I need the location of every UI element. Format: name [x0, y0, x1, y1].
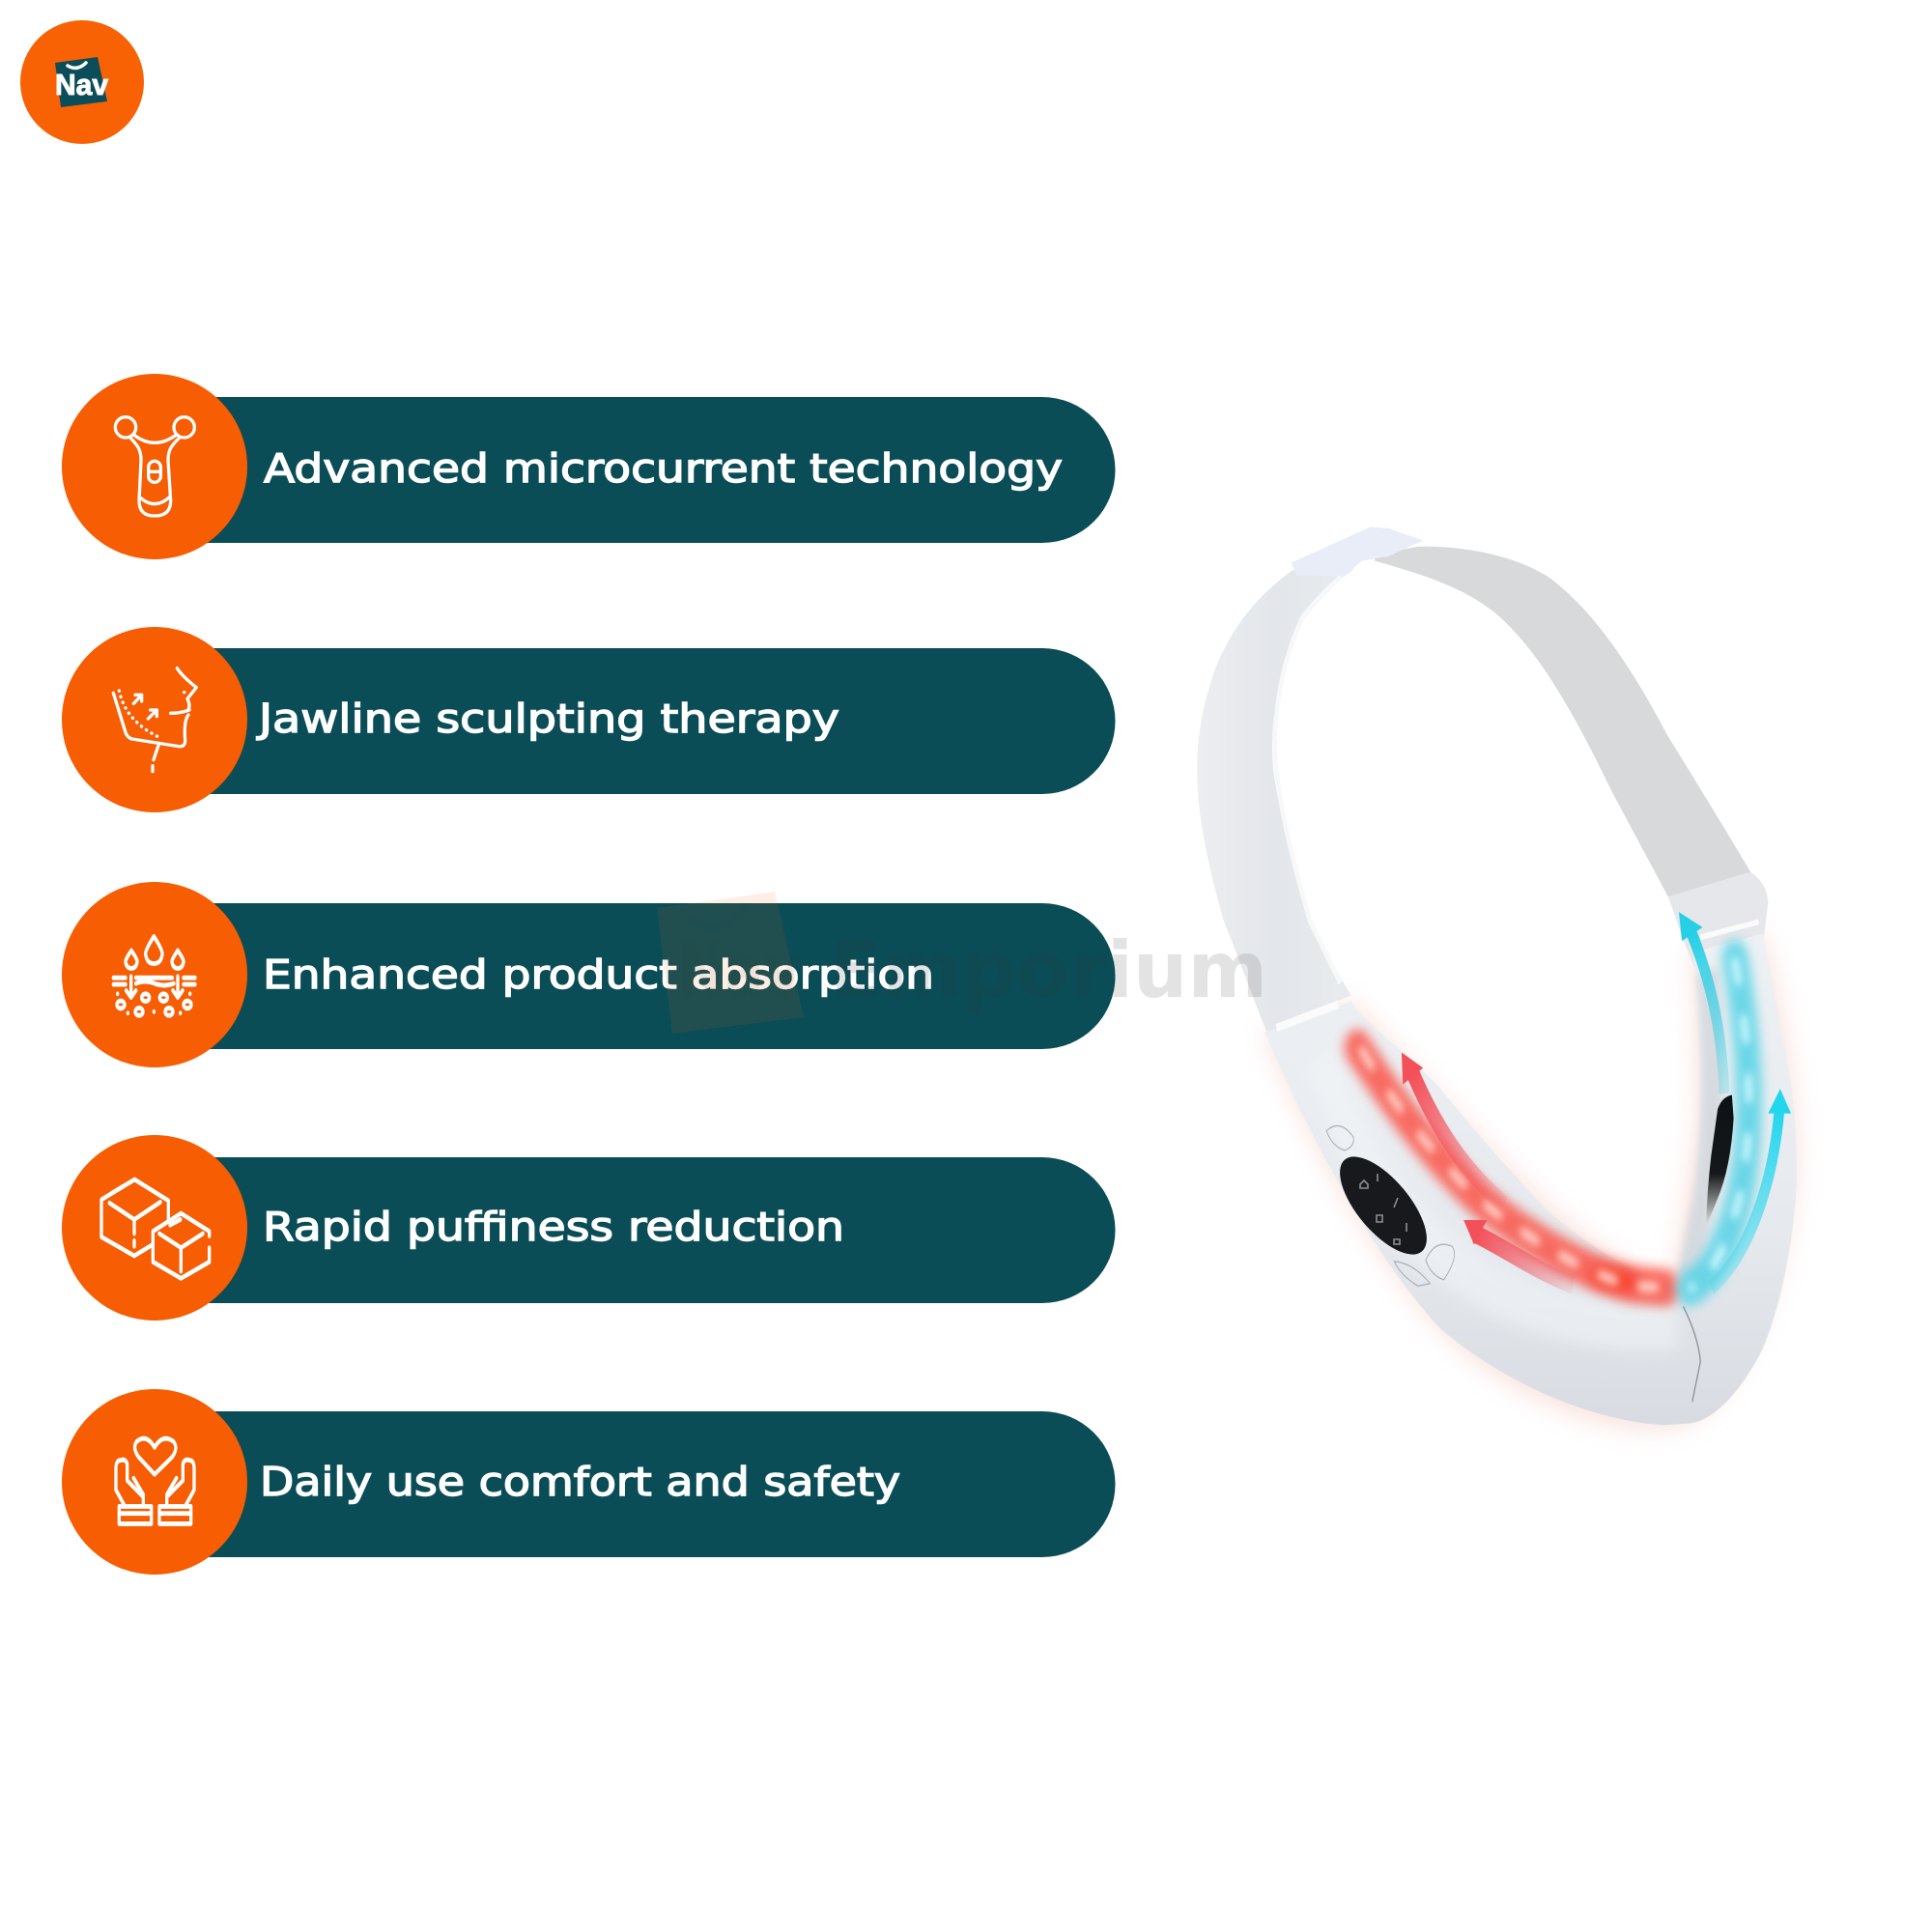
feature row: Advanced microcurrent technology — [62, 374, 1115, 559]
device shadow glow — [1264, 933, 1797, 1429]
feature row: Advanced microcurrent technology: Advanced microcurrent technology — [264, 445, 1063, 492]
feature row: Daily use comfort and safety — [62, 1389, 1115, 1575]
white stripe right — [1700, 922, 1759, 937]
red LED glow — [1357, 1047, 1666, 1288]
device body — [1264, 933, 1797, 1425]
watermark: Nav Emporium — [657, 892, 1267, 1034]
body light facet — [1319, 1057, 1677, 1326]
feature row: Enhanced product absorption: Enhanced product absorption — [263, 952, 934, 998]
feature row: Daily use comfort and safety: Daily use comfort and safety — [260, 1459, 900, 1505]
control panel display — [1324, 1143, 1442, 1268]
icon: microcurrent device — [115, 417, 194, 516]
icon: hands holding heart — [116, 1438, 194, 1523]
arrow: red lower — [1463, 1220, 1574, 1285]
blue LED lights — [1691, 961, 1748, 1288]
white stripe left — [1276, 1005, 1338, 1028]
arrow: blue upper — [1679, 912, 1724, 1094]
arrow: red upper — [1402, 1053, 1504, 1205]
logo badge — [20, 20, 144, 144]
feature row: Rapid puffiness reduction — [62, 1135, 1115, 1321]
feature row: Jawline sculpting therapy: Jawline sculpting therapy — [256, 696, 839, 742]
feature row: Rapid puffiness reduction: Rapid puffiness reduction — [263, 1204, 844, 1250]
product: V-line face lifting device — [1197, 527, 1797, 1429]
arrow: blue lower — [1711, 1089, 1791, 1288]
buckle — [1292, 527, 1423, 577]
right strap — [1375, 547, 1754, 896]
watermark: Nav Emporium: Nav — [676, 925, 802, 1015]
icon: ice cubes — [101, 1179, 210, 1278]
icon: jawline face profile — [113, 668, 196, 772]
blue LED glow — [1690, 958, 1748, 1288]
feature row: Jawline sculpting therapy — [62, 627, 1115, 812]
red LED hot spot — [1599, 1275, 1630, 1282]
body crease — [1683, 1306, 1700, 1402]
left strap — [1197, 554, 1353, 1032]
icon: droplets absorbing into skin — [113, 936, 195, 1015]
mirror slot — [1706, 1095, 1734, 1226]
logo badge: Nav — [55, 68, 109, 101]
watermark: Nav Emporium: Emporium — [830, 925, 1267, 1015]
control panel buttons — [1326, 1125, 1455, 1286]
body grey inner facet — [1688, 971, 1713, 1279]
red LED lights — [1362, 1051, 1663, 1288]
feature row: Enhanced product absorption — [62, 882, 1115, 1067]
right strap band — [1668, 872, 1768, 971]
